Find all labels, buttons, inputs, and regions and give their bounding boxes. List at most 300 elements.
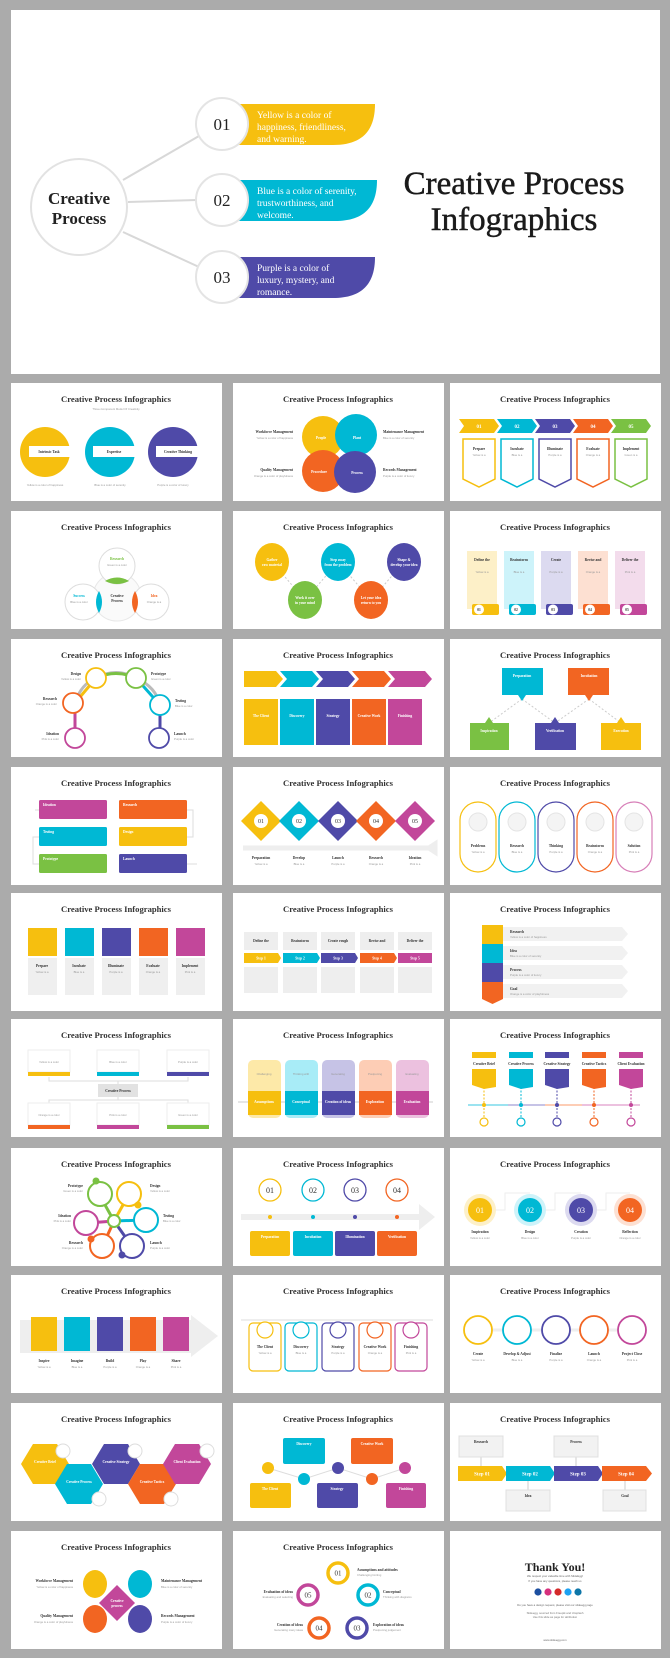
thumb 5: zigzag circles: in your mind: [295, 601, 315, 605]
thumb 17: pastel pill columns: Generating: [331, 1072, 345, 1076]
thumb 22: icon rectangles on arrow: Pink is a: [171, 1365, 182, 1369]
thumb 14: step columns: Step 3: [333, 956, 343, 960]
thumb 9: org chart speech boxes: Preparation: [513, 674, 531, 678]
thumb 15: vertical icon tabs with arrows: Purple is a color of luxury: [510, 973, 542, 977]
center circle: Creative Process: Creative: [48, 189, 110, 208]
thumb 28: creative process diamond: Maintenance Management: [161, 1579, 203, 1583]
thumb 22: icon rectangles on arrow: Imagine: [71, 1359, 84, 1363]
thumb 13: icon squares with gray cards: Incubate: [72, 964, 86, 968]
thumb 26: network boxes: Strategy: [331, 1487, 344, 1491]
thumb 19: flower diagram: Design: [150, 1184, 160, 1188]
thumb 3: five arrows with pentagon boxes: 03: [552, 425, 558, 430]
thumb 30: thank you slide: [450, 1531, 661, 1649]
thumb 4: creative process cluster: Blue is a color: [70, 600, 88, 604]
thumb 29: circular cycle 01-05: Thinking with diagrams: [383, 1595, 412, 1599]
thumb 15: vertical icon tabs with arrows: Idea: [510, 949, 517, 953]
thumb 15: vertical icon tabs with arrows: Orange is a color of playfulness: [510, 992, 550, 996]
thumb 5: zigzag circles: Let your idea: [361, 596, 381, 600]
thumb 11: diamonds 01-05: [233, 767, 444, 885]
thumb 8: chevrons with boxes: Strategy: [327, 714, 340, 718]
thumb 19: flower diagram: Research: [69, 1241, 83, 1245]
thumb 18: timeline flags: Creative Brief: [473, 1062, 496, 1066]
thumb 28: creative process diamond: Workforce Management: [35, 1579, 74, 1583]
thumb 29: circular cycle 01-05: Creation of ideas: [277, 1623, 304, 1627]
thumb 1: three component model: [11, 383, 222, 501]
thumb 14: step columns: Creative Process Infographics: [283, 904, 394, 914]
thumb 10: six colored bars: Creative Process Infographics: [61, 778, 172, 788]
thumb 2: venn four circles: Quality Management: [260, 468, 294, 472]
thumb 7: arch path of icons: Testing: [175, 699, 186, 703]
thumb 29: circular cycle 01-05: Challenging limiting: [357, 1573, 382, 1577]
thumb 16: creative process tree: [11, 1019, 222, 1137]
thumb 6: pastel columns with numbered tabs: 05: [625, 608, 629, 612]
thumb 21: stepped circles 01-04: Blue is a color: [521, 1236, 539, 1240]
thumb 15: vertical icon tabs with arrows: Blue is a color of serenity: [510, 954, 542, 958]
thumb 14: step columns: Step 4: [372, 956, 382, 960]
main title: [404, 166, 624, 238]
main title: Creative Process: [404, 166, 624, 202]
thumb 16: creative process tree: Blue is a color: [109, 1060, 127, 1064]
thumb 24: outlined circles with icons: Pink is a: [627, 1358, 638, 1362]
thumb 23: outlined cards with top circles: Pink is a: [406, 1351, 417, 1355]
thumb 22: icon rectangles on arrow: Orange is a: [136, 1365, 151, 1369]
thumb 15: vertical icon tabs with arrows: Yellow is a color of happiness: [510, 935, 547, 939]
thumb 9: org chart speech boxes: Creative Process Infographics: [500, 650, 611, 660]
thumb 27: step arrows with gray callouts: [450, 1403, 661, 1521]
thumb 20: pins on arrow band: 03: [351, 1186, 359, 1195]
thumb 21: stepped circles 01-04: Creative Process Infographics: [500, 1159, 611, 1169]
thumb 29: circular cycle 01-05: 04: [316, 1624, 323, 1632]
thumb 4: creative process cluster: Process: [111, 599, 123, 603]
thumb 2: venn four circles: Workforce Management: [255, 430, 294, 434]
thumb 7: arch path of icons: Purple is a color: [174, 737, 194, 741]
thumb 12: pill outlines with icons: Research: [510, 844, 524, 848]
bar 01 yellow: [225, 104, 375, 145]
thumb 20: pins on arrow band: 02: [309, 1186, 317, 1195]
thumb 5: zigzag circles: Gather: [267, 558, 278, 562]
thumb 3: five arrows with pentagon boxes: 01: [476, 425, 482, 430]
bar 03 purple: luxury, mystery, and: [257, 276, 335, 286]
thumb 3: five arrows with pentagon boxes: Blue is a: [512, 453, 523, 457]
thumb 10: six colored bars: Design: [123, 830, 133, 834]
thumb 10: six colored bars: Ideation: [43, 803, 56, 807]
thumb 27: step arrows with gray callouts: Process: [570, 1440, 582, 1444]
thumb 26: network boxes: Creative Process Infographics: [283, 1414, 394, 1424]
thumb 8: chevrons with boxes: [233, 639, 444, 757]
thumb 5: zigzag circles: Work it over: [295, 596, 315, 600]
thumb 16: creative process tree: Purple is a color: [178, 1060, 198, 1064]
thumb 9: org chart speech boxes: [450, 639, 661, 757]
thumb 20: pins on arrow band: 01: [266, 1186, 274, 1195]
thumb 23: outlined cards with top circles: The Client: [257, 1345, 274, 1349]
thumb 3: five arrows with pentagon boxes: Creative Process Infographics: [500, 394, 611, 404]
thumb 13: icon squares with gray cards: Implement: [182, 964, 199, 968]
thumb 29: circular cycle 01-05: [233, 1531, 444, 1649]
thumb 3: five arrows with pentagon boxes: [450, 383, 661, 501]
thumb 2: venn four circles: Yellow is a color of happiness: [256, 436, 294, 440]
thumb 12: pill outlines with icons: Solution: [628, 844, 640, 848]
thumb 11: diamonds 01-05: Creative Process Infographics: [283, 778, 394, 788]
bar 03 purple: [225, 257, 375, 298]
thumb 17: pastel pill columns: Thinking with: [293, 1072, 310, 1076]
thumb 25: hexagons: Creative Brief: [34, 1460, 57, 1464]
thumb 11: diamonds 01-05: Yellow is a: [254, 862, 268, 866]
thumb 23: outlined cards with top circles: Discovery: [293, 1345, 309, 1349]
thumb 12: pill outlines with icons: Blue is a: [512, 850, 523, 854]
thumb 3: five arrows with pentagon boxes: Evaluate: [586, 447, 600, 451]
thumb 17: pastel pill columns: Assumptions: [254, 1100, 274, 1104]
thumb 3: five arrows with pentagon boxes: Illuminate: [547, 447, 563, 451]
thumb 30: thank you slide: www.slideegg.com: [543, 1638, 567, 1642]
thumb 19: flower diagram: Orange is a color: [62, 1246, 83, 1250]
thumb 20: pins on arrow band: 04: [393, 1186, 401, 1195]
thumb 2: venn four circles: Orange is a color of playfulness: [254, 474, 294, 478]
thumb 11: diamonds 01-05: Launch: [332, 856, 344, 860]
thumb 5: zigzag circles: Shape &: [397, 558, 411, 562]
thumb 13: icon squares with gray cards: Evaluate: [146, 964, 160, 968]
thumb 17: pastel pill columns: Creation of ideas: [325, 1100, 352, 1104]
thumb 19: flower diagram: Launch: [150, 1241, 162, 1245]
thumb 21: stepped circles 01-04: Orange is a color: [619, 1236, 641, 1240]
thumb 24: outlined circles with icons: Finalize: [550, 1352, 562, 1356]
thumb 14: step columns: Define the: [253, 939, 269, 943]
thumb 5: zigzag circles: Step away: [330, 558, 346, 562]
thumb 3: five arrows with pentagon boxes: 02: [514, 425, 520, 430]
thumb 27: step arrows with gray callouts: Creative Process Infographics: [500, 1414, 611, 1424]
thumb 28: creative process diamond: Blue is a color of serenity: [161, 1585, 193, 1589]
thumb 11: diamonds 01-05: Preparation: [252, 856, 270, 860]
thumb 20: pins on arrow band: Preparation: [261, 1235, 279, 1239]
thumb 29: circular cycle 01-05: Assumptions and attitudes: [357, 1568, 398, 1572]
thumb 19: flower diagram: Blue is a color: [163, 1219, 181, 1223]
thumb 23: outlined cards with top circles: Yellow is a: [258, 1351, 272, 1355]
thumb 3: five arrows with pentagon boxes: 05: [628, 425, 634, 430]
thumb 28: creative process diamond: Creative Process Infographics: [61, 1542, 172, 1552]
thumb 10: six colored bars: Launch: [123, 857, 135, 861]
thumb 12: pill outlines with icons: Creative Process Infographics: [500, 778, 611, 788]
thumb 6: pastel columns with numbered tabs: Yellow is a: [475, 570, 489, 574]
thumb 28: creative process diamond: Creative: [110, 1599, 124, 1603]
thumb 6: pastel columns with numbered tabs: Pink is a: [625, 570, 636, 574]
thumb 12: pill outlines with icons: Problems: [471, 844, 486, 848]
thumb 16: creative process tree: Pink is a color: [109, 1113, 127, 1117]
thumb 7: arch path of icons: Yellow is a color: [61, 677, 81, 681]
thumb 23: outlined cards with top circles: Purple is a: [331, 1351, 345, 1355]
thumb 1: three component model: Expertise: [107, 450, 122, 454]
thumb 7: arch path of icons: [11, 639, 222, 757]
thumb 25: hexagons: Client Evaluation: [173, 1460, 201, 1464]
thumb 12: pill outlines with icons: Orange is a: [588, 850, 603, 854]
thumb 4: creative process cluster: Orange is a: [147, 600, 162, 604]
thumb 19: flower diagram: Green is a color: [63, 1189, 83, 1193]
thumb 1: three component model: Creative Process Infographics: [61, 394, 172, 404]
bar 01 yellow: Yellow is a color of: [257, 110, 332, 121]
thumb 4: creative process cluster: Success: [73, 594, 85, 598]
thumb 5: zigzag circles: return to you: [361, 601, 381, 605]
thumb 11: diamonds 01-05: Research: [369, 856, 383, 860]
thumb 7: arch path of icons: Green is a color: [151, 677, 171, 681]
thumb 12: pill outlines with icons: Thinking: [549, 844, 563, 848]
thumb 10: six colored bars: Testing: [43, 830, 54, 834]
number circles: 03: [214, 268, 230, 287]
thumb 17: pastel pill columns: Postponing: [368, 1072, 382, 1076]
thumb 7: arch path of icons: Orange is a color: [36, 702, 57, 706]
thumb 29: circular cycle 01-05: Evaluating and selecting: [263, 1595, 293, 1599]
thumb 7: arch path of icons: Creative Process Infographics: [61, 650, 172, 660]
thumb 3: five arrows with pentagon boxes: Implement: [623, 447, 640, 451]
thumb 25: hexagons: [11, 1403, 222, 1521]
bar 03 purple: romance.: [257, 288, 292, 298]
thumb 29: circular cycle 01-05: 03: [354, 1624, 361, 1632]
thumb 17: pastel pill columns: Creative Process Infographics: [283, 1030, 394, 1040]
thumb 16: creative process tree: Creative Process: [105, 1089, 131, 1093]
thumb 13: icon squares with gray cards: [11, 893, 222, 1011]
thumb 6: pastel columns with numbered tabs: Create: [551, 558, 562, 562]
thumb 27: step arrows with gray callouts: Research: [474, 1440, 488, 1444]
thumb 29: circular cycle 01-05: Evaluation of ideas: [264, 1590, 294, 1594]
center circle: Creative Process: [31, 159, 127, 255]
thumb 24: outlined circles with icons: Orange is a: [587, 1358, 602, 1362]
bar 01 yellow: and warning.: [257, 135, 307, 145]
thumb 2: venn four circles: Process: [351, 471, 363, 475]
thumb 3: five arrows with pentagon boxes: Purple is a: [548, 453, 562, 457]
thumb 29: circular cycle 01-05: Conceptual: [383, 1590, 401, 1594]
thumb 17: pastel pill columns: Evaluation: [404, 1100, 420, 1104]
thumb 17: pastel pill columns: Exploration: [366, 1100, 384, 1104]
thumb 6: pastel columns with numbered tabs: Revise and: [585, 558, 601, 562]
thumb 28: creative process diamond: Yellow is a color of happiness: [36, 1585, 74, 1589]
thumb 3: five arrows with pentagon boxes: Incubate: [510, 447, 524, 451]
thumb 26: network boxes: Discovery: [296, 1442, 312, 1446]
thumb 7: arch path of icons: Prototype: [151, 672, 167, 676]
thumb 19: flower diagram: [11, 1148, 222, 1266]
thumb 4: creative process cluster: Idea: [151, 594, 158, 598]
thumb 3: five arrows with pentagon boxes: Prepare: [473, 447, 486, 451]
thumb 4: creative process cluster: Green is a color: [107, 563, 127, 567]
thumb 17: pastel pill columns: Evaluating: [405, 1072, 419, 1076]
thumb 8: chevrons with boxes: Discovery: [289, 714, 305, 718]
thumb 24: outlined circles with icons: Blue is a: [512, 1358, 523, 1362]
thumb 27: step arrows with gray callouts: Step 02: [522, 1472, 538, 1478]
thumb 16: creative process tree: Orange is a color: [38, 1113, 60, 1117]
thumb 6: pastel columns with numbered tabs: Brainstorm: [510, 558, 528, 562]
main title: Infographics: [431, 202, 597, 238]
thumb 11: diamonds 01-05: Develop: [293, 856, 305, 860]
thumb 19: flower diagram: Creative Process Infographics: [61, 1159, 172, 1169]
bar 02 cyan: Blue is a color of serenity,: [257, 186, 357, 197]
thumb 11: diamonds 01-05: Orange is a: [369, 862, 384, 866]
thumb 30: thank you slide: If you have any questions, please reach us: [528, 1579, 582, 1583]
thumb 3: five arrows with pentagon boxes: 04: [590, 425, 596, 430]
thumb 19: flower diagram: Testing: [163, 1214, 174, 1218]
thumb 15: vertical icon tabs with arrows: Creative Process Infographics: [500, 904, 611, 914]
thumb 10: six colored bars: [11, 767, 222, 885]
thumb 8: chevrons with boxes: The Client: [253, 714, 270, 718]
thumb 16: creative process tree: Creative Process Infographics: [61, 1030, 172, 1040]
thumb 20: pins on arrow band: Illumination: [345, 1235, 365, 1239]
thumb 5: zigzag circles: from the problem: [324, 563, 352, 567]
thumb 6: pastel columns with numbered tabs: [450, 511, 661, 629]
thumb 6: pastel columns with numbered tabs: Purple is a: [549, 570, 563, 574]
thumb 20: pins on arrow band: Creative Process Infographics: [283, 1159, 394, 1169]
thumb 2: venn four circles: Maintenance Management: [383, 430, 425, 434]
thumb 26: network boxes: [233, 1403, 444, 1521]
thumb 13: icon squares with gray cards: Creative Process Infographics: [61, 904, 172, 914]
thumb 3: five arrows with pentagon boxes: Green is a: [625, 453, 638, 457]
thumb 23: outlined cards with top circles: Orange is a: [368, 1351, 383, 1355]
thumb 1: three component model: Yellow is a color of happiness: [27, 483, 64, 487]
thumb 9: org chart speech boxes: Incubation: [581, 674, 597, 678]
thumb 29: circular cycle 01-05: 02: [364, 1592, 372, 1600]
thumb 15: vertical icon tabs with arrows: Research: [510, 930, 524, 934]
thumb 13: icon squares with gray cards: Illuminate: [108, 964, 124, 968]
thumb 29: circular cycle 01-05: Postponing judgement: [373, 1628, 401, 1632]
number circles: 02: [214, 191, 230, 210]
thumb 21: stepped circles 01-04: Design: [525, 1230, 535, 1234]
number circles: 01: [214, 115, 230, 134]
thumb 28: creative process diamond: Records Management: [161, 1614, 195, 1618]
thumb 8: chevrons with boxes: Creative Work: [358, 714, 380, 718]
thumb 23: outlined cards with top circles: Blue is a: [296, 1351, 307, 1355]
thumb 18: timeline flags: Creative Process: [508, 1062, 534, 1066]
thumb 10: six colored bars: Research: [123, 803, 137, 807]
thumb 7: arch path of icons: Ideation: [46, 732, 59, 736]
thumb 25: hexagons: Creative Tactics: [140, 1480, 165, 1484]
thumb 27: step arrows with gray callouts: Idea: [525, 1494, 532, 1498]
thumb 6: pastel columns with numbered tabs: 01: [477, 608, 481, 612]
thumb 12: pill outlines with icons: Brainstorm: [586, 844, 604, 848]
thumb 23: outlined cards with top circles: Finishing: [404, 1345, 418, 1349]
thumb 30: thank you slide: Slideegg, sourced from Freepik and Unsplash: [527, 1611, 584, 1615]
thumb 5: zigzag circles: [233, 511, 444, 629]
thumb 1: three component model: Intrinsic Task: [38, 450, 60, 454]
thumb 6: pastel columns with numbered tabs: Deliver the: [622, 558, 639, 562]
thumb 16: creative process tree: Green is a color: [178, 1113, 198, 1117]
thumb 9: org chart speech boxes: Inspiration: [480, 729, 498, 733]
thumb 13: icon squares with gray cards: Pink is a: [185, 970, 196, 974]
thumb 9: org chart speech boxes: Verification: [546, 729, 564, 733]
thumb 19: flower diagram: Purple is a color: [150, 1246, 170, 1250]
thumb 29: circular cycle 01-05: Creative Process Infographics: [283, 1542, 394, 1552]
thumb 23: outlined cards with top circles: Strategy: [332, 1345, 345, 1349]
thumb 12: pill outlines with icons: [450, 767, 661, 885]
thumb 29: circular cycle 01-05: Generating many ideas: [274, 1628, 304, 1632]
thumb 13: icon squares with gray cards: Blue is a: [74, 970, 85, 974]
center circle: Creative Process: Process: [52, 209, 107, 228]
thumb 30: thank you slide: Do you have a design request, please visit our slideegg page: [517, 1603, 593, 1607]
thumb 12: pill outlines with icons: Pink is a: [629, 850, 640, 854]
thumb 6: pastel columns with numbered tabs: Creative Process Infographics: [500, 522, 611, 532]
thumb 7: arch path of icons: Launch: [174, 732, 186, 736]
thumb 28: creative process diamond: Quality Management: [40, 1614, 74, 1618]
number circles: [196, 98, 248, 303]
bar 02 cyan: trustworthiness, and: [257, 199, 334, 209]
thumb 6: pastel columns with numbered tabs: 02: [514, 608, 518, 612]
thumb 27: step arrows with gray callouts: Step 03: [570, 1472, 586, 1478]
thumb 10: six colored bars: Prototype: [43, 857, 59, 861]
thumb 24: outlined circles with icons: Launch: [588, 1352, 600, 1356]
thumb 26: network boxes: The Client: [262, 1487, 279, 1491]
bar 03 purple: Purple is a color of: [257, 263, 330, 274]
thumb 11: diamonds 01-05: Pink is a: [410, 862, 421, 866]
thumb 27: step arrows with gray callouts: Step 04: [618, 1472, 634, 1478]
thumb 2: venn four circles: Blue is a color of serenity: [383, 436, 415, 440]
thumb 29: circular cycle 01-05: 01: [334, 1570, 342, 1578]
thumb 22: icon rectangles on arrow: Inspire: [39, 1359, 50, 1363]
thumb 2: venn four circles: Procedure: [311, 470, 327, 474]
thumb 21: stepped circles 01-04: Inspiration: [471, 1230, 489, 1234]
thumb 19: flower diagram: Prototype: [68, 1184, 83, 1188]
thumb 20: pins on arrow band: Verification: [388, 1235, 406, 1239]
thumb 22: icon rectangles on arrow: [11, 1275, 222, 1393]
thumb 24: outlined circles with icons: Create: [473, 1352, 484, 1356]
thumb 14: step columns: Brainstorm: [291, 939, 309, 943]
thumb 4: creative process cluster: Creative: [110, 594, 124, 598]
thumb 11: diamonds 01-05: Purple is a: [331, 862, 345, 866]
thumb 14: step columns: [233, 893, 444, 1011]
thumb 21: stepped circles 01-04: [450, 1148, 661, 1266]
thumb 21: stepped circles 01-04: Purple is a color: [571, 1236, 591, 1240]
thumb 15: vertical icon tabs with arrows: Goal: [510, 987, 517, 991]
thumb 22: icon rectangles on arrow: Creative Process Infographics: [61, 1286, 172, 1296]
thumb 21: stepped circles 01-04: Yellow is a color: [470, 1236, 490, 1240]
connector lines: [123, 136, 199, 267]
thumb 22: icon rectangles on arrow: Share: [172, 1359, 181, 1363]
thumb 21: stepped circles 01-04: 02: [526, 1206, 534, 1215]
thumb 19: flower diagram: Yellow is a color: [150, 1189, 170, 1193]
thumb 11: diamonds 01-05: 04: [373, 819, 379, 825]
thumb 20: pins on arrow band: Incubation: [305, 1235, 321, 1239]
thumb 30: thank you slide: Use this slide as page for attribution: [533, 1615, 578, 1619]
bar 02 cyan: welcome.: [257, 211, 294, 221]
thumb 3: five arrows with pentagon boxes: Orange is a: [586, 453, 601, 457]
thumb 13: icon squares with gray cards: Yellow is a: [35, 970, 49, 974]
thumb 28: creative process diamond: process: [111, 1604, 123, 1608]
thumb 6: pastel columns with numbered tabs: Blue is a: [514, 570, 525, 574]
hero slide: [11, 10, 660, 374]
thumb 16: creative process tree: Yellow is a color: [39, 1060, 59, 1064]
thumb 14: step columns: Revise and: [369, 939, 385, 943]
thumb 15: vertical icon tabs with arrows: Process: [510, 968, 522, 972]
thumb 18: timeline flags: Creative Tactics: [582, 1062, 607, 1066]
thumb 5: zigzag circles: raw material: [262, 563, 282, 567]
thumb 25: hexagons: Creative Strategy: [103, 1460, 130, 1464]
thumb 24: outlined circles with icons: Yellow is a: [471, 1358, 485, 1362]
thumb 7: arch path of icons: Design: [71, 672, 81, 676]
thumb 18: timeline flags: Creative Process Infographics: [500, 1030, 611, 1040]
thumb 17: pastel pill columns: Conceptual: [292, 1100, 310, 1104]
thumb 7: arch path of icons: Blue is a color: [175, 704, 193, 708]
thumb 15: vertical icon tabs with arrows: [450, 893, 661, 1011]
thumb 14: step columns: Create rough: [328, 939, 348, 943]
thumb 2: venn four circles: Creative Process Infographics: [283, 394, 394, 404]
thumb 5: zigzag circles: develop your idea: [390, 563, 418, 567]
thumb 2: venn four circles: Purple is a color of luxury: [383, 474, 415, 478]
thumb 11: diamonds 01-05: 01: [258, 819, 264, 825]
thumb 14: step columns: Step 5: [410, 956, 420, 960]
thumb 6: pastel columns with numbered tabs: 03: [551, 608, 555, 612]
thumb 11: diamonds 01-05: Ideation: [409, 856, 421, 860]
thumb 22: icon rectangles on arrow: Blue is a: [72, 1365, 83, 1369]
thumb 9: org chart speech boxes: Execution: [613, 729, 629, 733]
thumb 21: stepped circles 01-04: 01: [476, 1206, 484, 1215]
thumb 21: stepped circles 01-04: 03: [577, 1206, 585, 1215]
thumb 23: outlined cards with top circles: [233, 1275, 444, 1393]
thumb 6: pastel columns with numbered tabs: 04: [588, 608, 592, 612]
thumb 27: step arrows with gray callouts: Step 01: [474, 1472, 490, 1478]
thumb 11: diamonds 01-05: 03: [335, 819, 341, 825]
thumb 14: step columns: Step 1: [256, 956, 266, 960]
